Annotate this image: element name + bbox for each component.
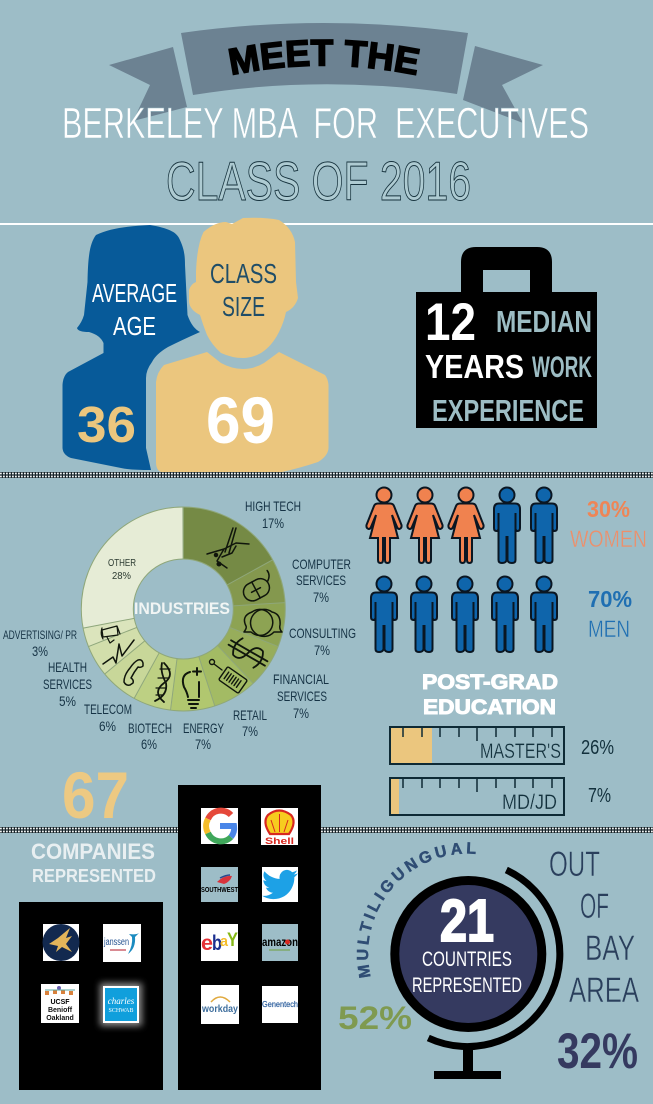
stat: 52%: 52% [338, 1000, 412, 1036]
chart labels: SERVICES [277, 688, 327, 704]
label: average age [92, 278, 177, 341]
heading: companies represented [31, 839, 156, 886]
chart labels: HIGH TECH [245, 498, 301, 514]
stat: out of bay area: OUT [549, 845, 600, 884]
chart labels: ENERGY [183, 720, 224, 736]
icon: circuit [207, 528, 249, 568]
chart labels: 6% [99, 718, 116, 734]
briefcase: median years work experience: 12 [425, 293, 476, 352]
heading: companies represented: REPRESENTED [32, 866, 156, 886]
logo: twitter [262, 867, 298, 902]
label: class size [210, 258, 277, 322]
logo: workday: workday [201, 1003, 238, 1015]
heading: post-grad education: EDUCATION [423, 696, 556, 719]
icon: megaphone [101, 626, 120, 643]
heading: companies represented: COMPANIES [31, 839, 155, 864]
chart labels: SERVICES [43, 676, 92, 692]
number: 67: 67 [62, 758, 129, 832]
chart labels: RETAIL [233, 707, 267, 723]
logo: janssen [103, 924, 141, 962]
logo: amazon: amazon [262, 935, 298, 949]
chart labels: HEALTH [48, 659, 87, 675]
logo: amazon [262, 924, 298, 961]
logo: southwest [201, 867, 239, 902]
bar: md/jd 7%: 7% [588, 785, 611, 807]
stat: 70% men: 70% [588, 586, 632, 612]
label: class size: CLASS [210, 258, 277, 289]
briefcase: median years work experience [416, 247, 597, 428]
globe: 21 countries represented: COUNTRIES [422, 948, 512, 971]
chart labels [3, 498, 356, 752]
logo: shell [261, 808, 298, 846]
chart labels: SERVICES [296, 572, 346, 588]
icon: computer mouse [239, 570, 277, 604]
logo: ebay: b [212, 932, 222, 955]
chart labels: TELECOM [84, 701, 132, 717]
donut chart: industries [81, 507, 285, 711]
icon: speech bubbles [244, 609, 282, 636]
logo: charles schwab: charles [108, 996, 135, 1006]
briefcase: median years work experience: EXPERIENCE [432, 393, 584, 428]
header ribbon [109, 23, 543, 122]
logo: shell: Shell [265, 836, 294, 846]
icon: dna helix [155, 663, 170, 702]
briefcase: median years work experience: WORK [532, 351, 592, 384]
bar: md/jd 7% [390, 778, 611, 815]
chart labels: 3% [32, 643, 48, 659]
arc label: multilingual: MULTILIGUNGUAL [356, 842, 476, 978]
heading: post-grad education: POST-GRAD [422, 671, 558, 694]
chart labels: BIOTECH [128, 720, 172, 736]
label: average age: AVERAGE [92, 278, 177, 308]
chart labels: 17% [262, 515, 284, 531]
icon: light bulb [183, 668, 201, 708]
logo: janssen: janssen [103, 937, 129, 948]
label: industries: INDUSTRIES [134, 599, 230, 618]
label: other [108, 557, 136, 582]
icon: price tag with barcode [210, 660, 247, 693]
chart labels: 7% [242, 723, 258, 739]
logo: google [201, 808, 238, 844]
logo: charles schwab [100, 983, 142, 1026]
stat: 70% men [588, 586, 632, 643]
title: class of 2016: CLASS OF 2016 [166, 150, 471, 212]
logo: ebay: a [220, 933, 229, 950]
logo: ebay [201, 924, 238, 961]
briefcase: median years work experience: YEARS [425, 348, 524, 385]
bar: md/jd 7%: MD/JD [502, 791, 557, 814]
chart labels: 5% [59, 693, 76, 709]
stat: out of bay area: BAY [585, 929, 635, 968]
chart labels: CONSULTING [289, 625, 356, 641]
logo: ucsf benioff oakland: Benioff [48, 1007, 73, 1014]
logo: ucsf benioff oakland: UCSF [50, 999, 70, 1006]
logo: ebay: e [201, 932, 213, 955]
heading: post-grad education [422, 671, 558, 719]
panel: company logos left [19, 902, 163, 1090]
stat: 30% women: 30% [587, 496, 630, 522]
stat: out of bay area [549, 845, 639, 1010]
label: other: 28% [112, 570, 131, 582]
icon: pulse [103, 640, 134, 664]
icon: dollar sign [225, 634, 271, 672]
globe: 21 countries represented: 21 [440, 888, 494, 954]
label: other: OTHER [108, 557, 136, 569]
chart labels: FINANCIAL [273, 671, 329, 687]
chart labels: 6% [141, 736, 157, 752]
label: class size: SIZE [222, 291, 265, 322]
silhouette: class size [156, 218, 328, 472]
globe: 21 countries represented [395, 870, 560, 1079]
chart labels: ADVERTISING/ PR [3, 628, 77, 642]
bar: master's 26%: 26% [581, 737, 614, 759]
heading: meet the: MEET THE [228, 39, 420, 76]
globe: 21 countries represented: REPRESENTED [412, 974, 522, 997]
logo: workday [201, 985, 239, 1024]
chart labels: 7% [195, 736, 211, 752]
people pictogram: women and men [366, 488, 557, 652]
chart labels: 7% [293, 705, 309, 721]
number: 69: 69 [206, 383, 275, 457]
chart labels: 7% [314, 642, 330, 658]
chart labels: 7% [313, 589, 329, 605]
briefcase: median years work experience: MEDIAN [496, 304, 592, 339]
silhouette: average age [62, 225, 200, 470]
logo: ucsf benioff oakland: Oakland [46, 1015, 74, 1022]
stat: 70% men: MEN [588, 616, 630, 643]
icon: telephone [124, 660, 143, 685]
logo: genentech [262, 986, 298, 1023]
logo: genentech: Genentech [262, 999, 298, 1009]
bar: master's 26%: MASTER'S [480, 740, 561, 763]
stat: 30% women [570, 496, 647, 553]
label: average age: AGE [113, 311, 156, 341]
bar: master's 26% [390, 727, 614, 764]
logo: charles schwab: SCHWAB [108, 1008, 134, 1014]
number: 36: 36 [77, 396, 136, 453]
logo: hhs [42, 924, 80, 961]
logo: ucsf benioff oakland [41, 984, 79, 1023]
logo: ebay: Y [227, 930, 238, 951]
stat: out of bay area: OF [580, 887, 609, 926]
logo: southwest: SOUTHWEST [201, 887, 239, 894]
chart labels: COMPUTER [292, 556, 351, 572]
panel: company logos right [178, 785, 321, 1090]
